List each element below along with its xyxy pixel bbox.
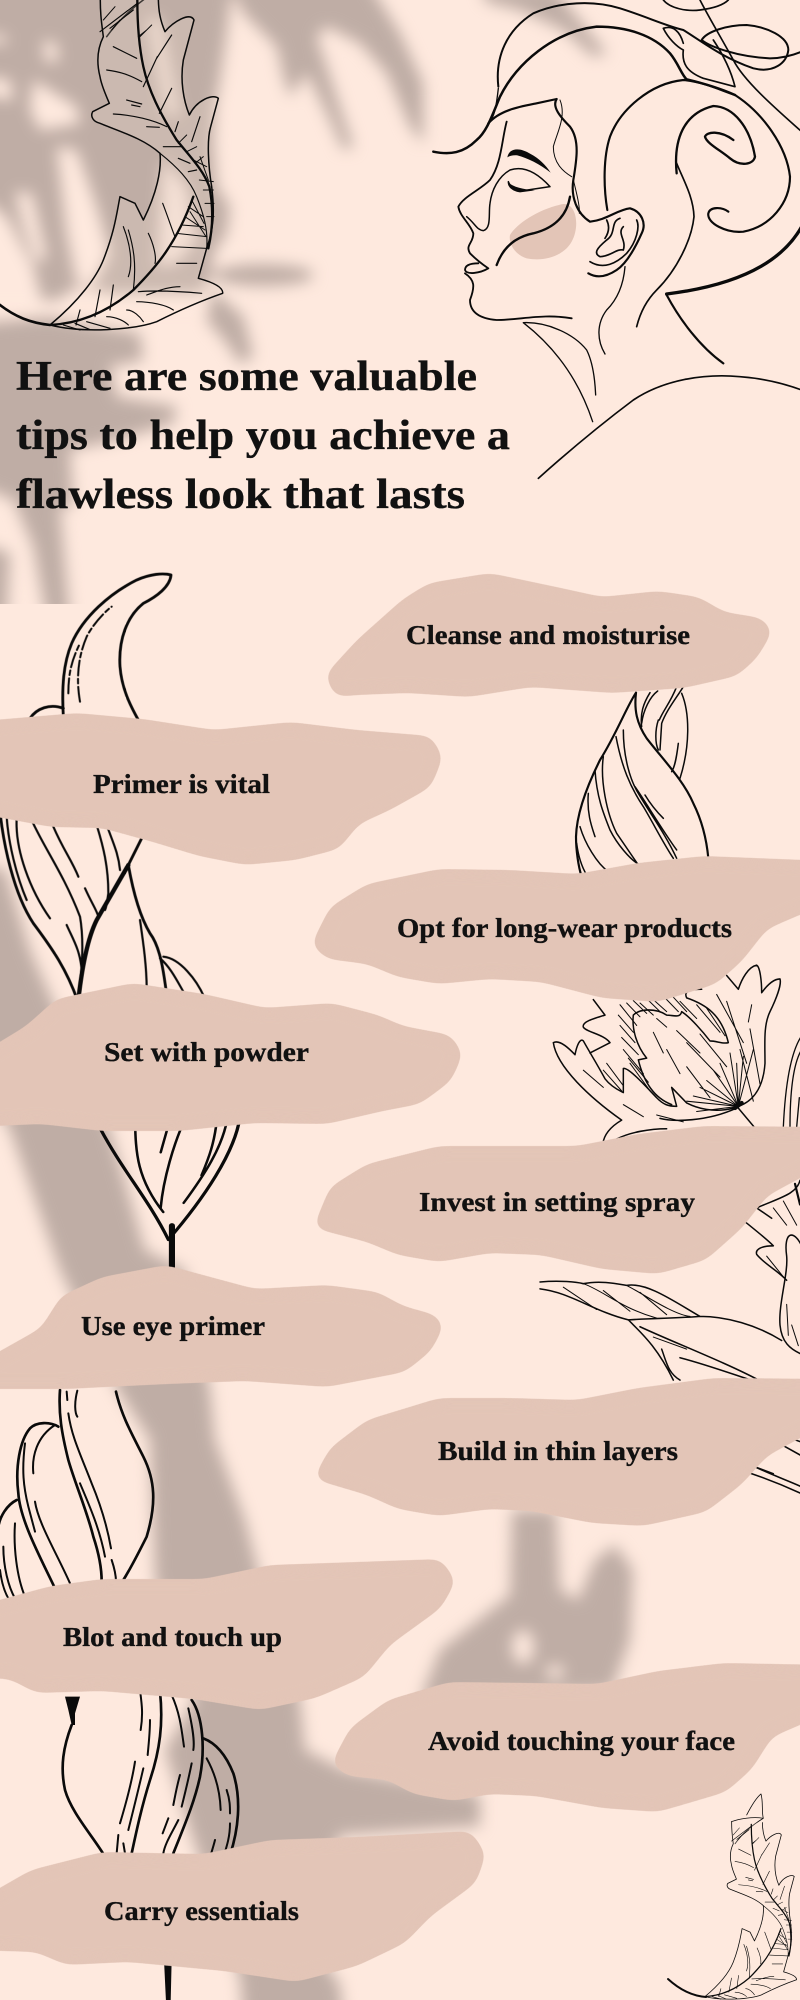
plant: right flower and leaf bbox=[540, 965, 800, 1494]
title: flawless look that lasts bbox=[16, 472, 465, 518]
ear and thin hair bbox=[590, 218, 638, 265]
title bbox=[16, 354, 510, 518]
cut leaf ends bbox=[747, 1437, 800, 1494]
tip 4: Set with powder bbox=[0, 983, 463, 1131]
icon: leaf bottom-right bbox=[668, 1794, 797, 1999]
shadow: palm fronds top bbox=[0, 0, 607, 620]
plant: left stem middle bbox=[99, 1117, 240, 1267]
tip 9: Avoid touching your face bbox=[331, 1663, 800, 1812]
neck bbox=[523, 267, 625, 422]
cheek line bbox=[497, 197, 570, 265]
tip 4: Set with powder: Set with powder bbox=[104, 1037, 309, 1067]
plant: left stem lower bbox=[0, 1390, 153, 1600]
tip 8: Blot and touch up: Blot and touch up bbox=[63, 1622, 282, 1652]
flower hatching bbox=[583, 994, 760, 1122]
tip 1: Cleanse and moisturise bbox=[325, 573, 773, 697]
right petals bbox=[783, 1036, 800, 1127]
plant: left stem bottom bbox=[63, 1690, 238, 2000]
forehead and ear line bbox=[488, 99, 644, 276]
tip 10: Carry essentials: Carry essentials bbox=[104, 1896, 299, 1926]
hair lines bbox=[433, 27, 735, 153]
illustration: face line art bbox=[433, 0, 800, 478]
tip 9: Avoid touching your face: Avoid touching your face bbox=[428, 1726, 735, 1756]
lower flower bbox=[745, 1180, 800, 1354]
tip 2: Primer is vital bbox=[0, 713, 443, 865]
tip 3: Opt for long-wear products bbox=[311, 856, 800, 1002]
shadow: palm fronds lower bbox=[0, 860, 633, 2000]
tip 2: Primer is vital: Primer is vital bbox=[93, 769, 271, 799]
tip 3: Opt for long-wear products: Opt for long-wear products bbox=[397, 913, 732, 943]
tip 5: Invest in setting spray bbox=[313, 1126, 800, 1274]
face profile bbox=[458, 122, 572, 320]
tip 7: Build in thin layers: Build in thin layers bbox=[438, 1436, 678, 1466]
blush bbox=[510, 204, 576, 259]
tip 1: Cleanse and moisturise: Cleanse and moisturise bbox=[406, 620, 690, 650]
tip 6: Use eye primer: Use eye primer bbox=[81, 1311, 265, 1341]
title: tips to help you achieve a bbox=[16, 413, 510, 459]
tip 10: Carry essentials bbox=[0, 1831, 486, 1982]
tip 8: Blot and touch up bbox=[0, 1559, 456, 1710]
icon: leaf top-left bbox=[0, 0, 223, 330]
tip 6: Use eye primer bbox=[0, 1265, 444, 1389]
shoulder bbox=[538, 376, 800, 478]
plant: right stem upper bbox=[576, 687, 708, 877]
nose and eye bbox=[467, 169, 550, 231]
tip 7: Build in thin layers bbox=[313, 1378, 800, 1526]
flower outline bbox=[553, 965, 780, 1145]
tip 5: Invest in setting spray: Invest in setting spray bbox=[419, 1187, 696, 1217]
plant: left stem upper bbox=[0, 574, 204, 1000]
twisted leaf bbox=[540, 1281, 782, 1381]
right hair bbox=[605, 80, 790, 232]
title: Here are some valuable bbox=[16, 354, 477, 400]
